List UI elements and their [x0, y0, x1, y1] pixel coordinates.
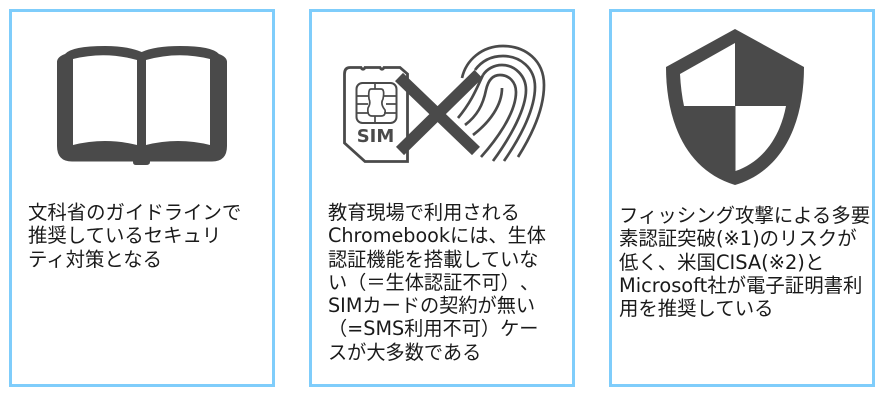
- text: phishing: 低く、米国CISA(※2)と: [619, 251, 824, 274]
- text: guideline: 推奨しているセキュリ: [28, 224, 221, 247]
- text: phishing: Microsoft社が電子証明書利: [619, 274, 862, 297]
- icon: open book: [57, 46, 227, 165]
- text: chromebook: Chromebookには、生体: [328, 224, 546, 247]
- text: guideline: 文科省のガイドラインで: [28, 201, 241, 224]
- icon: SIM card: [344, 68, 408, 162]
- text: phishing: 用を推奨している: [619, 297, 774, 320]
- icon: fingerprint: [458, 46, 544, 161]
- icon: cross mark: [399, 74, 478, 151]
- text: chromebook: SIMカードの契約が無い: [328, 294, 535, 317]
- icon: shield: [666, 29, 804, 185]
- text: phishing: [619, 204, 870, 320]
- icon: SIM card crossed with fingerprint: [344, 46, 544, 162]
- text: guideline: [28, 201, 241, 271]
- panel: guideline: [9, 9, 275, 387]
- panel: phishing: [609, 9, 875, 387]
- text: chromebook: （=SMS利用不可）ケー: [328, 317, 538, 340]
- text: chromebook: い（＝生体認証不可）、: [328, 271, 539, 294]
- panel: chromebook: [309, 9, 575, 387]
- icon: SIM card: SIM: [357, 126, 394, 147]
- text: chromebook: 教育現場で利用される: [328, 201, 520, 224]
- text: phishing: フィッシング攻撃による多要: [619, 204, 870, 227]
- text: chromebook: 認証機能を搭載していな: [328, 248, 538, 271]
- text: guideline: ティ対策となる: [28, 248, 162, 271]
- text: chromebook: [328, 201, 546, 364]
- text: chromebook: スが大多数である: [328, 341, 481, 364]
- text: phishing: 素認証突破(※1)のリスクが: [619, 227, 857, 250]
